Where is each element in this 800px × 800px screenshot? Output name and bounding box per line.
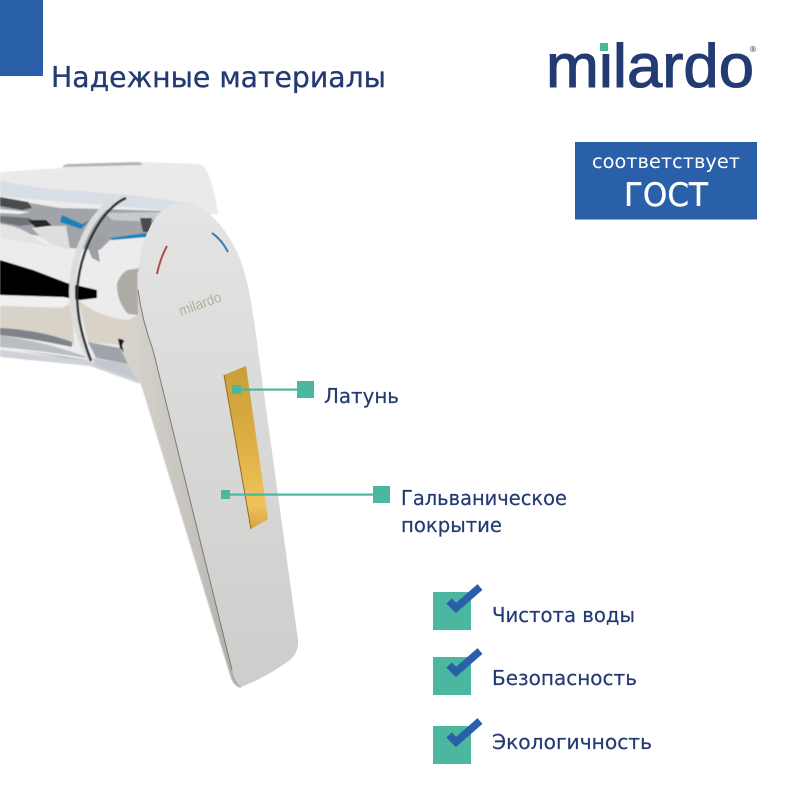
- badge: ГОСТ: [575, 142, 757, 220]
- hot mark: [157, 246, 167, 274]
- feature: ecology: [433, 721, 652, 764]
- feature: ecology: Экологичность: [492, 730, 652, 754]
- faucet chrome parts: [0, 162, 250, 688]
- beige lower body: [0, 303, 74, 345]
- title: Надежные материалы: [51, 61, 386, 94]
- face edge line: [138, 290, 232, 670]
- body: [0, 196, 165, 384]
- lower chrome reflections: [0, 328, 72, 347]
- cold mark: [212, 233, 228, 252]
- black reflection: [0, 260, 97, 300]
- callout: brass: Латунь: [324, 384, 399, 408]
- feature: safety: Безопасность: [492, 666, 637, 690]
- callout: plating: покрытие: [401, 513, 502, 537]
- corner accent block: [0, 0, 43, 76]
- callout: plating: [221, 486, 567, 537]
- feature: water purity: [433, 587, 635, 630]
- right lower chrome: [88, 342, 128, 364]
- collar ring: [72, 197, 123, 361]
- logo: milardo: milardo: [546, 32, 754, 100]
- recess beside handle: [117, 268, 140, 315]
- badge: ГОСТ: соответствует: [592, 150, 740, 173]
- rear plate: [0, 162, 218, 220]
- upper reflection band: [0, 197, 165, 250]
- handle bevel: [122, 270, 250, 688]
- brass cutaway: [224, 366, 268, 529]
- handle engraved logo: milardo: [177, 290, 224, 320]
- callout: brass: [232, 381, 399, 408]
- callout: plating: Гальваническое: [401, 486, 567, 510]
- logo: milardo: ®: [749, 45, 757, 54]
- feature: water purity: Чистота воды: [492, 603, 635, 627]
- handle front face: [138, 202, 298, 687]
- feature: safety: [433, 651, 637, 695]
- badge: ГОСТ: ГОСТ: [624, 176, 708, 214]
- faucet photo: [0, 162, 298, 688]
